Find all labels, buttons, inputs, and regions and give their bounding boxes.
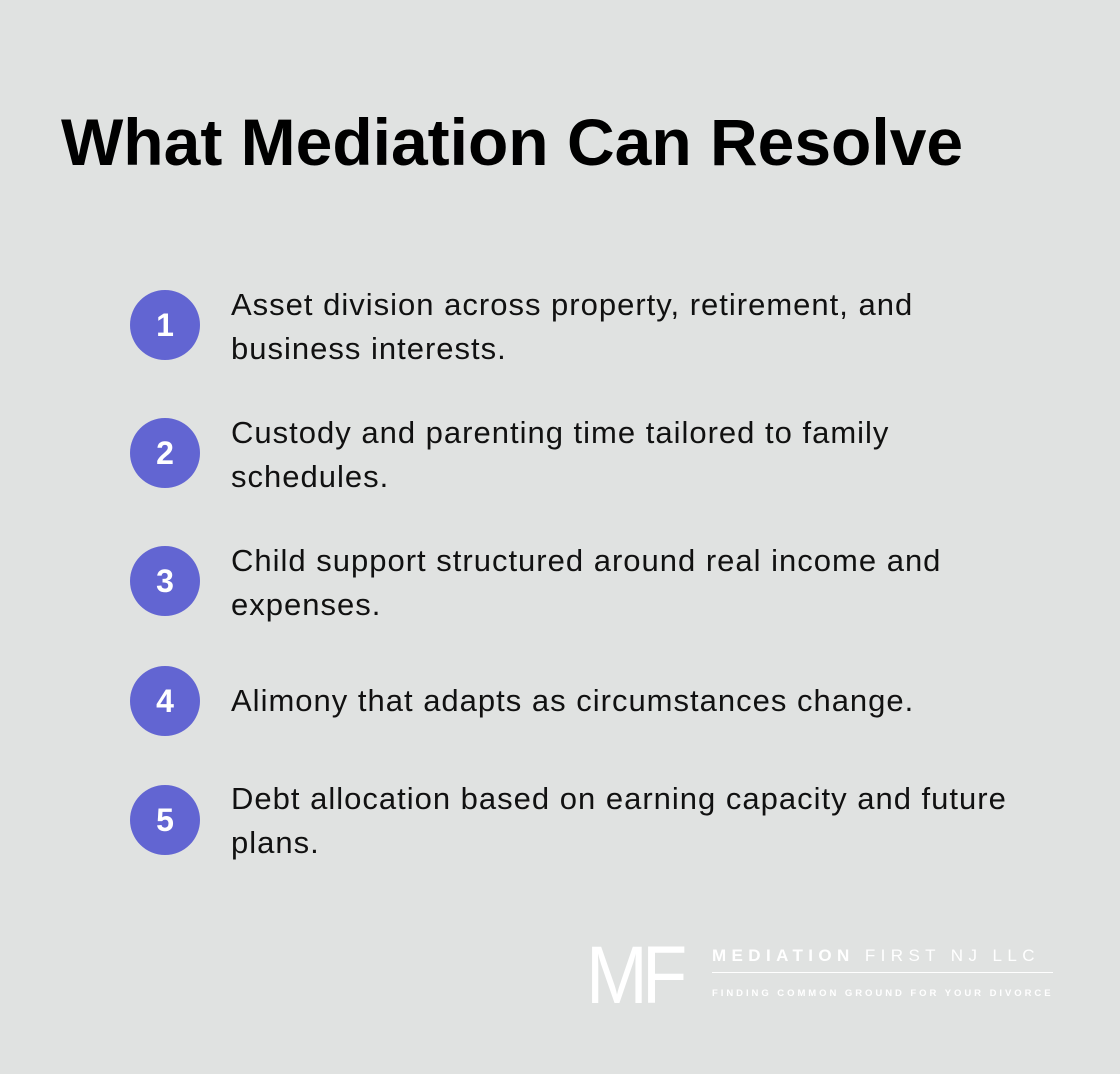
item 1 — [130, 287, 913, 366]
item 5: Debt allocation based on earning capacity and future — [231, 781, 1007, 816]
item 4: 4 — [156, 683, 174, 719]
item 3: expenses. — [231, 587, 381, 622]
item 5 — [130, 781, 1007, 860]
logo name: MEDIATION FIRST NJ LLC — [712, 946, 1040, 965]
item 2 — [130, 415, 889, 494]
item 5: 5 — [156, 802, 174, 838]
item 1: Asset division across property, retirement, and — [231, 287, 913, 322]
logo mark MF: MF — [586, 928, 682, 1021]
item 3: 3 — [156, 563, 174, 599]
item 2: schedules. — [231, 459, 389, 494]
logo tagline: FINDING COMMON GROUND FOR YOUR DIVORCE — [712, 988, 1054, 999]
item 2: Custody and parenting time tailored to family — [231, 415, 889, 450]
item 2: 2 — [156, 435, 174, 471]
title: What Mediation Can Resolve — [61, 105, 963, 179]
item 4 — [130, 666, 914, 736]
item 3: Child support structured around real income and — [231, 543, 941, 578]
item 5: plans. — [231, 825, 320, 860]
item 1: business interests. — [231, 331, 507, 366]
logo — [586, 928, 1054, 1021]
item 3 — [130, 543, 941, 622]
item 1: 1 — [156, 307, 174, 343]
item 4: Alimony that adapts as circumstances change. — [231, 683, 914, 718]
